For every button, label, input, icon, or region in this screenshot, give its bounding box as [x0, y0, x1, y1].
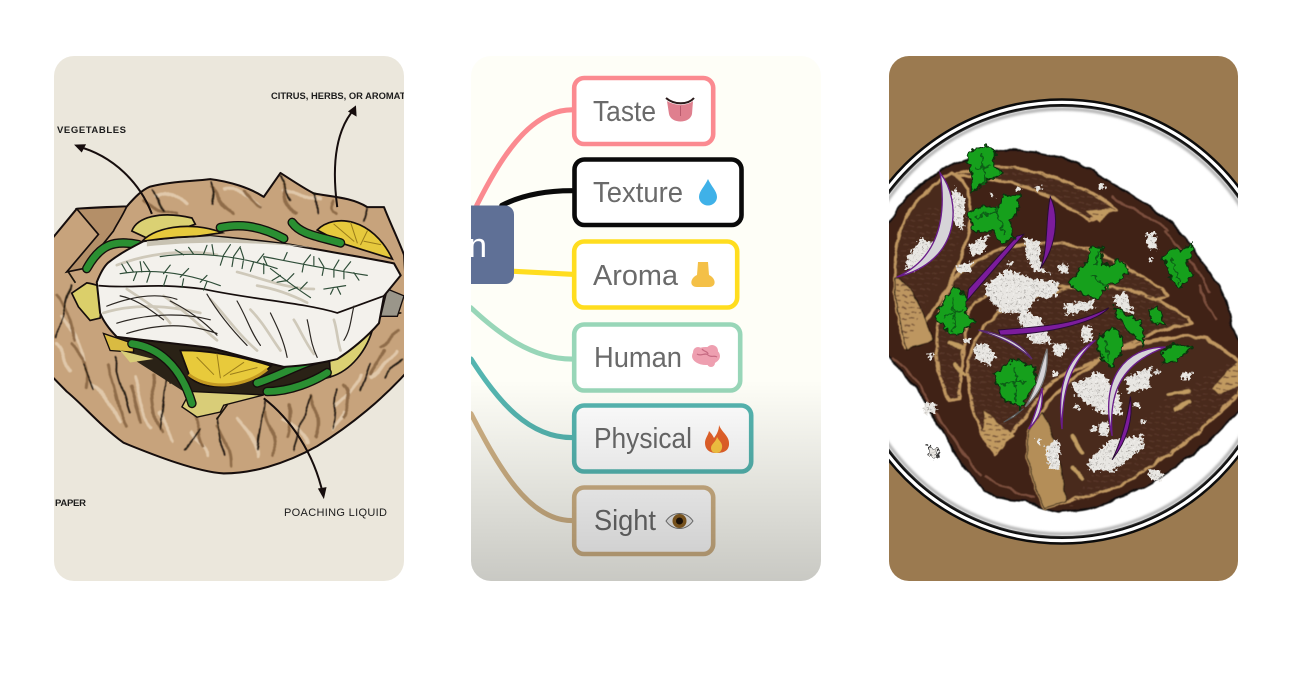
- node: aroma: Aroma: [593, 260, 679, 292]
- icon: eye: [666, 514, 693, 528]
- illustration: mole-covered tortillas: [885, 146, 1246, 512]
- wrinkle texture: [57, 175, 401, 467]
- panel: enmoladas on a plate illustration: [889, 56, 1238, 581]
- gradient fade at panel bottom: [471, 412, 821, 581]
- label: citrus, herbs, or aromatics: CITRUS, HERBS, OR AROMATICS: [271, 91, 421, 102]
- icon: water drop: [699, 179, 717, 206]
- cilantro leaves: [935, 146, 1192, 409]
- node: physical: Physical: [594, 423, 692, 455]
- node: human: Human: [594, 342, 682, 374]
- central node: [471, 206, 514, 284]
- node: aroma: [574, 242, 737, 308]
- icon: brain: [692, 345, 720, 367]
- node: taste: Taste: [593, 96, 656, 128]
- central node: n: [468, 227, 487, 265]
- arrow to poaching liquid: [264, 398, 327, 499]
- parchment paper: [50, 173, 411, 473]
- node: human: [574, 324, 740, 390]
- icon: tongue: [666, 98, 694, 122]
- arrow to vegetables: [74, 144, 152, 214]
- mole sauce: [885, 150, 1246, 512]
- illustration: parchment, vegetables and fish: [50, 105, 411, 499]
- node: sight: Sight: [594, 505, 656, 537]
- label: paper: PAPER: [55, 498, 86, 509]
- node: physical: [574, 406, 751, 472]
- fish fillet with dill: [97, 236, 404, 367]
- label: poaching liquid: POACHING LIQUID: [284, 507, 387, 519]
- panel: fish in parchment illustration: [50, 56, 421, 581]
- vegetables and lemons: [72, 215, 392, 417]
- node: sight: [574, 488, 713, 554]
- tortillas: [895, 168, 1239, 508]
- crumbled cheese: [905, 184, 1192, 480]
- red onion slivers: [897, 173, 1166, 460]
- node: texture: [574, 160, 742, 225]
- label: vegetables: VEGETABLES: [57, 125, 126, 136]
- icon: nose: [691, 262, 715, 287]
- arrow to citrus, herbs, or aromatics: [335, 105, 357, 207]
- node: taste: [574, 78, 713, 144]
- mind map connector lines: [471, 110, 572, 521]
- panel: flavor mind map: [460, 56, 821, 581]
- node: texture: Texture: [593, 177, 683, 209]
- icon: fire: [705, 425, 729, 453]
- plate: [889, 98, 1238, 545]
